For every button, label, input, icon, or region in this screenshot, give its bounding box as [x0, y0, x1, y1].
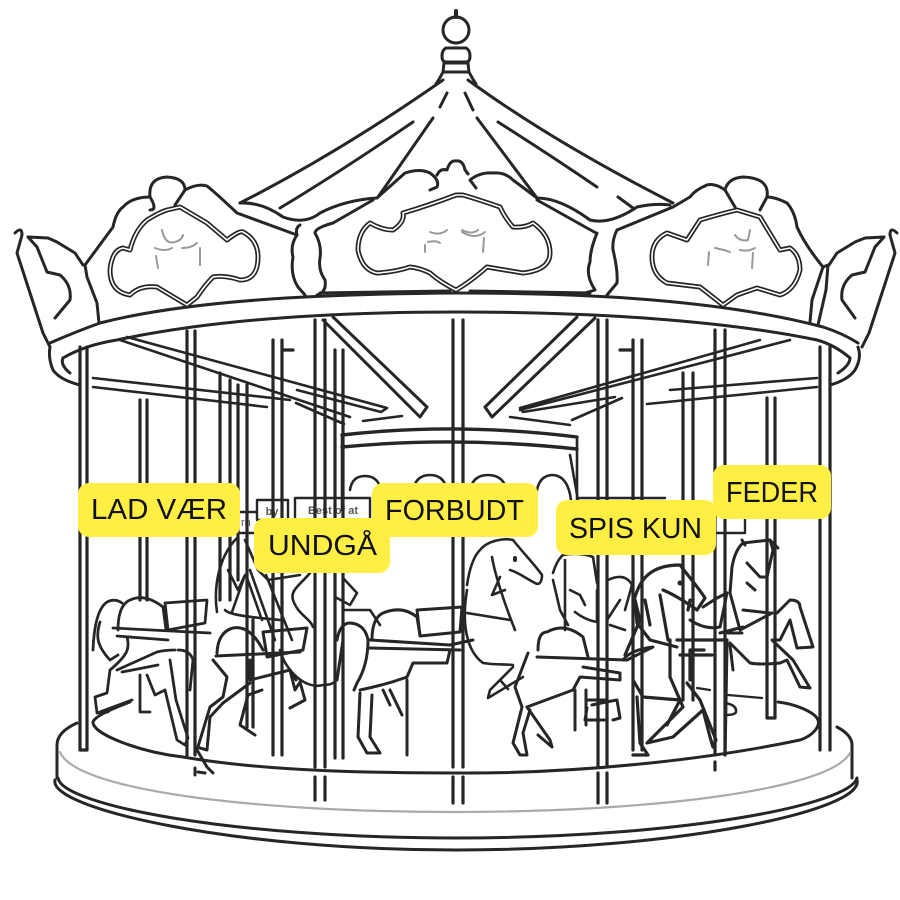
centre crown ornament: [320, 161, 673, 295]
centre panel frame: [358, 195, 550, 290]
label: FORBUDT: [372, 483, 538, 537]
horse far right: [690, 540, 813, 715]
label: FORBUDT: FORBUDT: [385, 495, 524, 527]
crown ring: [49, 293, 859, 385]
horse front left: [195, 628, 307, 775]
signs: [240, 498, 745, 533]
signs: rh: [241, 517, 251, 529]
centre panel face: [425, 230, 485, 252]
label: LAD VÆR: LAD VÆR: [91, 494, 227, 526]
horse front right: [625, 565, 727, 755]
label: FEDER: FEDER: [726, 477, 818, 509]
right panel frame: [652, 210, 800, 305]
canopy roof: [240, 80, 673, 208]
rear beams and central drum: [93, 337, 817, 510]
left crown ornament: [15, 177, 377, 347]
rear horses: [216, 538, 632, 698]
horse front centre: [513, 628, 653, 755]
signs: Best of at: [308, 505, 358, 517]
label: SPIS KUN: SPIS KUN: [569, 513, 702, 545]
label: SPIS KUN: [556, 500, 716, 555]
label: FEDER: [713, 465, 831, 519]
front diagonal beams: [323, 317, 595, 417]
poles: [80, 320, 830, 803]
horse centre left: [337, 607, 473, 755]
label: LAD VÆR: [78, 483, 240, 537]
label: UNDGÅ: UNDGÅ: [268, 529, 378, 562]
horse far left: [93, 598, 210, 745]
label: UNDGÅ: [254, 518, 390, 573]
platform: [55, 702, 857, 850]
signs: by: [266, 506, 279, 518]
right panel face: [708, 230, 755, 268]
left panel face: [155, 230, 200, 268]
finial: [436, 11, 476, 84]
right crown ornament: [673, 177, 897, 347]
left panel frame: [110, 207, 258, 305]
